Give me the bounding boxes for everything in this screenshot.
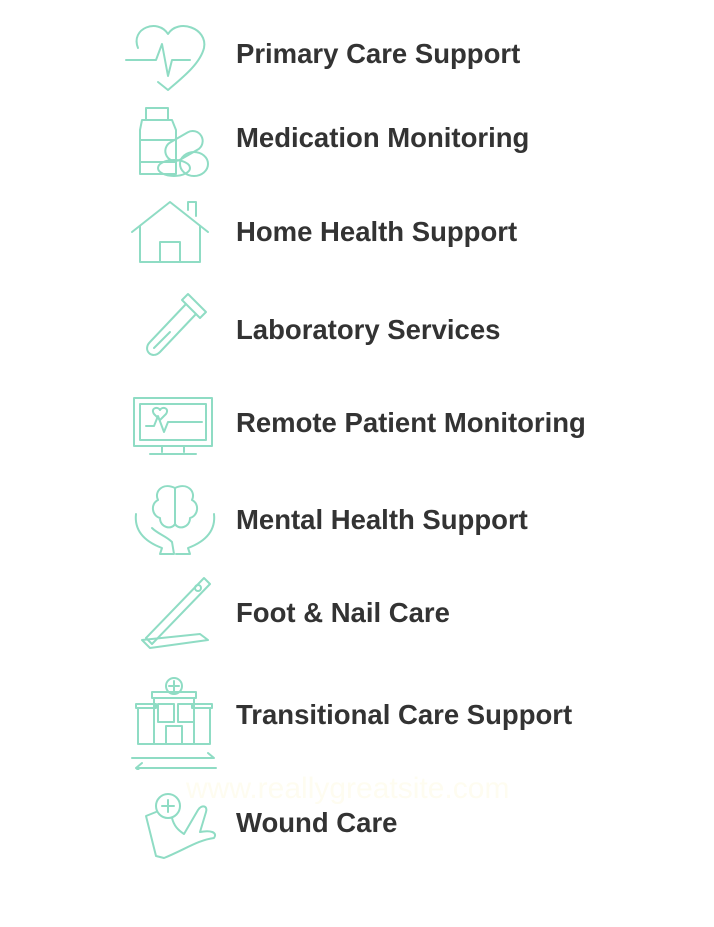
watermark: www.reallygreatsite.com <box>186 772 509 805</box>
text: Laboratory Services: Laboratory Services <box>236 314 500 345</box>
text: Primary Care Support: Primary Care Support <box>236 38 520 69</box>
icon: test tube <box>146 293 207 356</box>
icon: brain in hands <box>134 485 216 555</box>
icon: heart pulse <box>125 25 206 91</box>
icon: wound plaster <box>145 793 216 859</box>
text: Mental Health Support: Mental Health Support <box>236 504 528 535</box>
text: Remote Patient Monitoring: Remote Patient Monitoring <box>236 407 586 438</box>
icon: nail clipper <box>141 577 211 649</box>
text: Medication Monitoring: Medication Monitoring <box>236 122 529 153</box>
icon: medication <box>139 107 209 177</box>
icon: hospital <box>131 677 217 770</box>
text: Transitional Care Support: Transitional Care Support <box>236 699 572 730</box>
icon: monitor <box>133 397 213 455</box>
text: Foot & Nail Care: Foot & Nail Care <box>236 597 450 628</box>
icon: house <box>131 201 209 263</box>
text: Home Health Support: Home Health Support <box>236 216 517 247</box>
text: Wound Care: Wound Care <box>236 807 397 838</box>
